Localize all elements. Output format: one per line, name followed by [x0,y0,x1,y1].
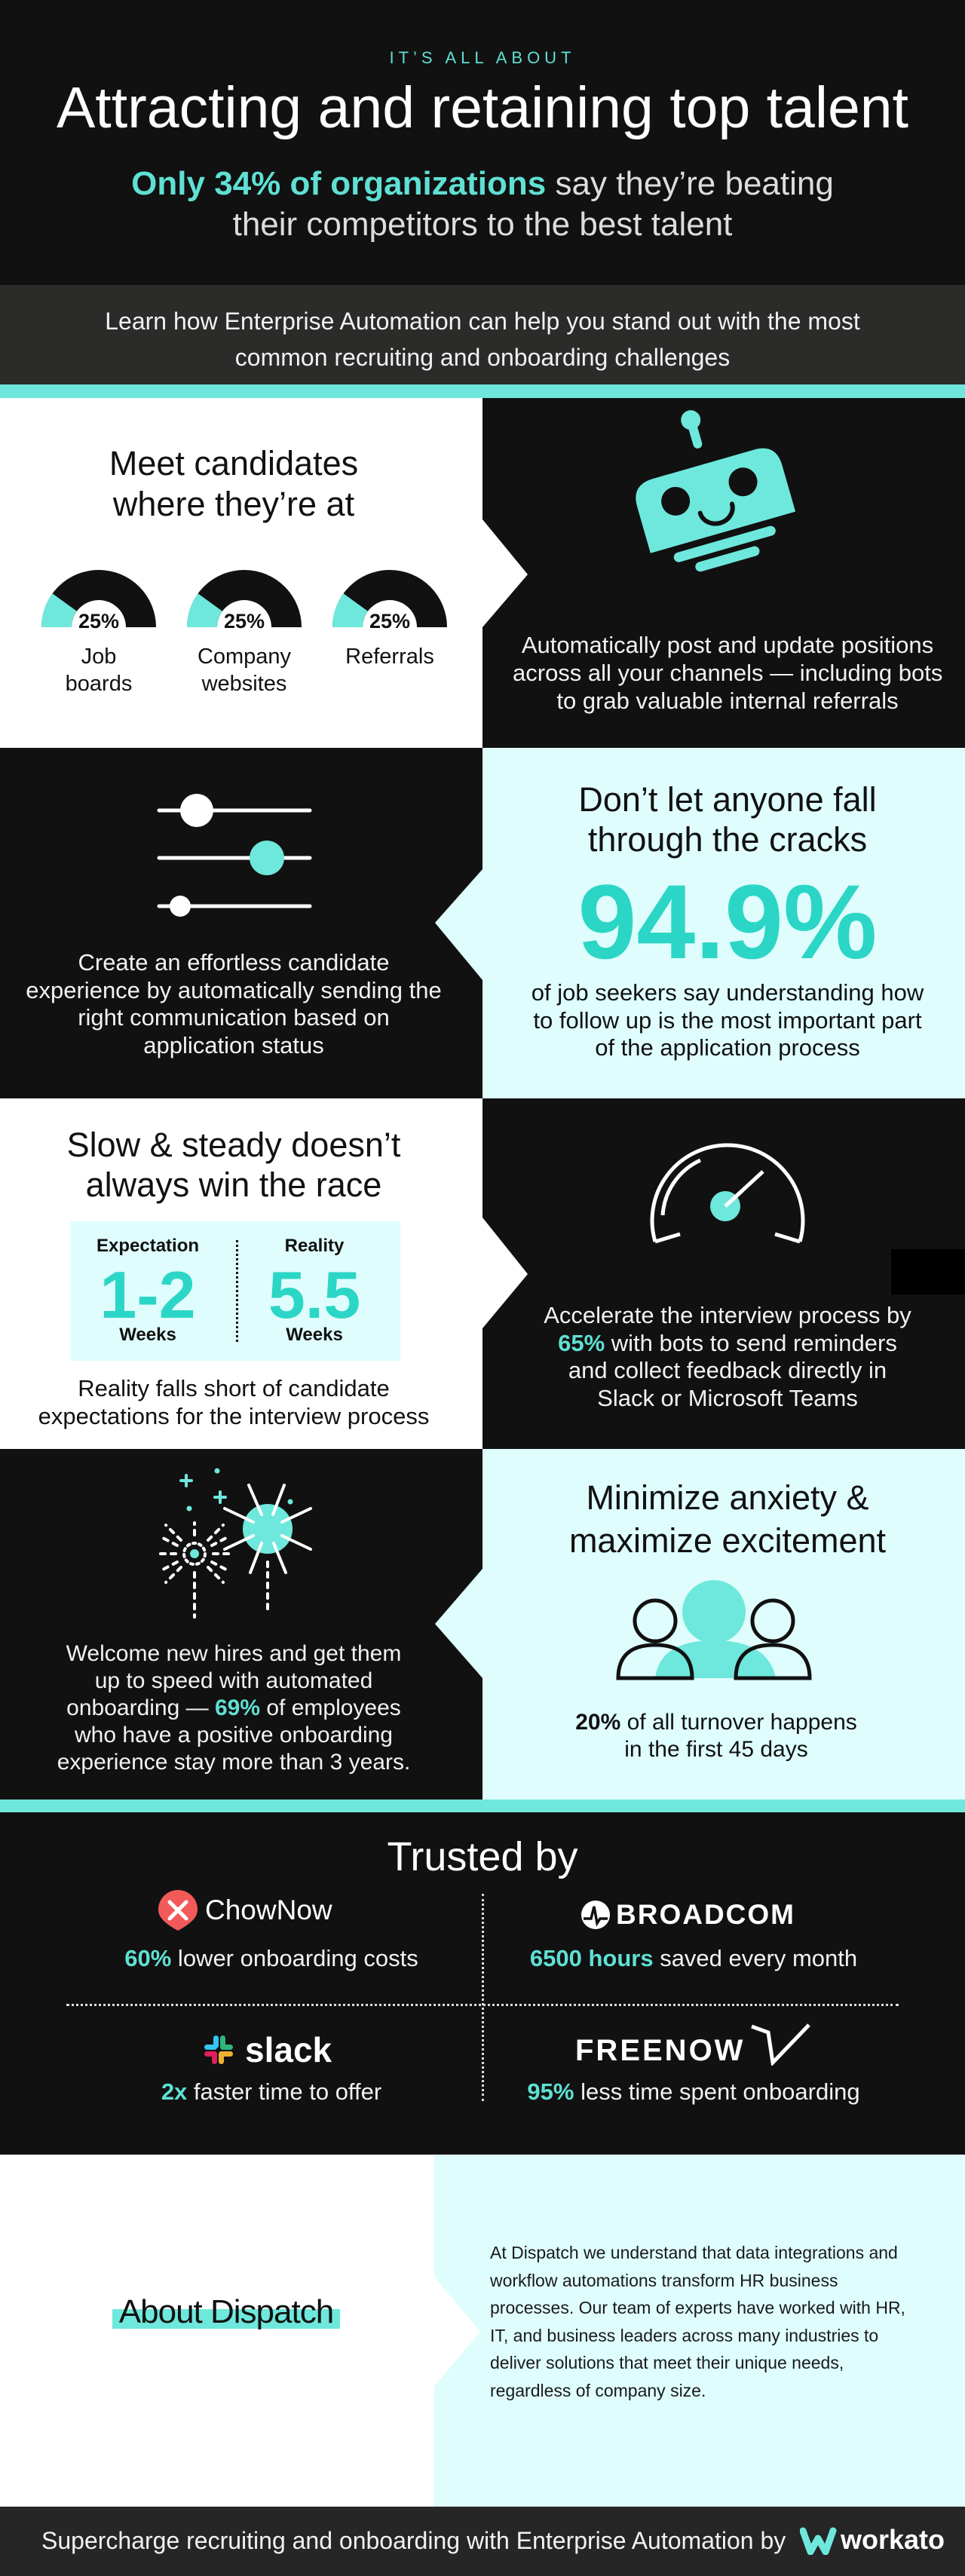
eyebrow: IT’S ALL ABOUT [389,48,576,67]
gauge 2 [187,570,302,627]
divider [236,1240,238,1342]
text: effortless experience [26,949,442,1058]
redaction block [891,1249,965,1294]
text: accelerate: Accelerate the interview process by [544,1302,911,1328]
text: welcome new hires [57,1641,410,1775]
text: accelerate: 65% with bots to send reminders [558,1330,897,1355]
heading: don't let anyone fall: Don’t let anyone fall [578,780,877,819]
text: about paragraph: processes. Our team of experts have worked with HR, [490,2298,905,2317]
text: welcome new hires: onboarding — 69% of employees [66,1695,401,1720]
stat: slack: 2x faster time to offer [161,2078,381,2105]
subtitle [131,165,834,243]
icon: speedometer [650,1143,805,1244]
subtitle: Only 34% of organizations say they’re beating [131,165,834,202]
stat: 94.9%: 94.9% [578,862,877,981]
text: effortless experience: right communication based on [78,1004,390,1031]
logo: slack [204,2030,332,2069]
heading: Trusted by [387,1834,578,1879]
gauge labels: 25% [78,610,119,633]
logo: freenow [575,2023,810,2067]
logo: freenow: FREENOW [575,2034,745,2067]
gauges [41,570,447,627]
logo: slack: slack [245,2030,332,2069]
section 3 background [482,1098,965,1449]
heading: slow & steady [67,1126,401,1204]
heading: about dispatch: About Dispatch [119,2293,333,2330]
text: automatically post [513,632,942,714]
intro band: common recruiting and onboarding challenges [235,344,730,371]
heading: where they’re at [113,485,354,523]
gauge 3 [332,570,447,627]
section 1 background [482,398,965,748]
text: welcome new hires: Welcome new hires and get them [66,1641,401,1666]
text: automatically post: Automatically post and update positions [522,632,933,658]
heading: slow & steady: Slow & steady doesn’t [67,1126,400,1164]
text: job seekers: of the application process [595,1034,860,1061]
text: job seekers: of job seekers say understanding how [532,979,924,1006]
section 4 background [0,1449,965,1800]
text: turnover: 20% of all turnover happens [575,1710,857,1735]
text: about paragraph: workflow automations transform HR business [490,2271,838,2290]
reality: Reality [285,1236,344,1256]
text: accelerate [544,1302,911,1411]
text: automatically post: to grab valuable internal referrals [556,688,899,714]
text: about paragraph: regardless of company size. [490,2381,706,2400]
logo: broadcom: BROADCOM [616,1899,795,1930]
text: effortless experience: application status [143,1031,324,1058]
text: welcome new hires: who have a positive onboarding [75,1723,393,1747]
text: job seekers [532,979,924,1061]
about section background [434,2155,965,2507]
gauge labels: 25% [224,610,265,633]
text: about paragraph: deliver solutions that meet their unique needs, [490,2353,844,2372]
icon: sliders [157,794,312,917]
intro band [0,285,965,384]
stat: freenow: 95% less time spent onboarding [527,2078,860,2105]
comparison box: 1-2 [100,1257,196,1332]
gauge 1 [41,570,156,627]
icon: people [617,1580,811,1680]
comparison box: Weeks [119,1325,176,1345]
text: about paragraph [490,2243,905,2400]
text: effortless experience: Create an effortless candidate [78,949,390,976]
heading: don't let anyone fall: through the cracks [588,820,867,859]
heading: slow & steady: always win the race [86,1165,381,1204]
gauge labels: Referrals [345,645,434,669]
comparison box: 5.5 [268,1257,360,1332]
stat: chownow: 60% lower onboarding costs [124,1945,418,1971]
stat: broadcom: 6500 hours saved every month [530,1945,857,1971]
text: accelerate: Slack or Microsoft Teams [597,1384,858,1411]
footer: Supercharge recruiting and onboarding with Enterprise Automation by [41,2527,786,2554]
text: about paragraph: At Dispatch we understand that data integrations and [490,2243,898,2262]
footer [0,2507,965,2576]
heading: minimize anxiety: maximize excitement [569,1521,886,1560]
gauge labels: Company [198,645,291,669]
gauge labels: 25% [369,610,410,633]
heading: don't let anyone fall [578,780,877,859]
title: Attracting and retaining top talent [57,75,908,140]
gauge labels: boards [66,672,132,696]
logo: workato: workato [841,2524,945,2555]
heading: minimize anxiety: Minimize anxiety & [586,1478,869,1517]
logo: chownow [158,1890,332,1931]
icon: robot [636,410,795,571]
text: reality falls short: Reality falls short of candidate [78,1375,390,1401]
comparison box: Weeks [286,1325,343,1345]
icon: fireworks [159,1469,312,1619]
expectation: Expectation [96,1236,199,1256]
panel: meet candidates [109,444,358,523]
text: accelerate: and collect feedback directly in [568,1357,887,1383]
heading: minimize anxiety [569,1478,886,1560]
intro band: Learn how Enterprise Automation can help you stand out with the most [105,308,860,335]
text: turnover: in the first 45 days [624,1737,808,1762]
gauge labels: Job [81,645,116,669]
text: job seekers: to follow up is the most important part [533,1007,922,1033]
heading: Meet candidates [109,444,358,482]
subtitle: their competitors to the best talent [233,206,732,243]
text: automatically post: across all your channels — including bots [513,660,942,686]
panel: trusted by [0,1812,965,2155]
text: effortless experience: experience by automatically sending the [26,977,442,1003]
dividers [66,2004,899,2006]
comparison box [71,1221,400,1361]
text: reality falls short [38,1375,429,1429]
logo: chownow: ChowNow [205,1894,332,1925]
text: about paragraph: IT, and business leaders across many industries to [490,2326,878,2345]
text: welcome new hires: experience stay more than 3 years. [57,1750,410,1775]
header [0,0,965,285]
heading [109,444,358,523]
gauge labels [66,610,434,696]
text: welcome new hires: up to speed with automated [95,1668,372,1693]
text: reality falls short: expectations for the interview process [38,1402,429,1429]
gauge labels: websites [202,672,286,696]
section 2 background [0,748,965,1098]
text: turnover [575,1710,857,1762]
